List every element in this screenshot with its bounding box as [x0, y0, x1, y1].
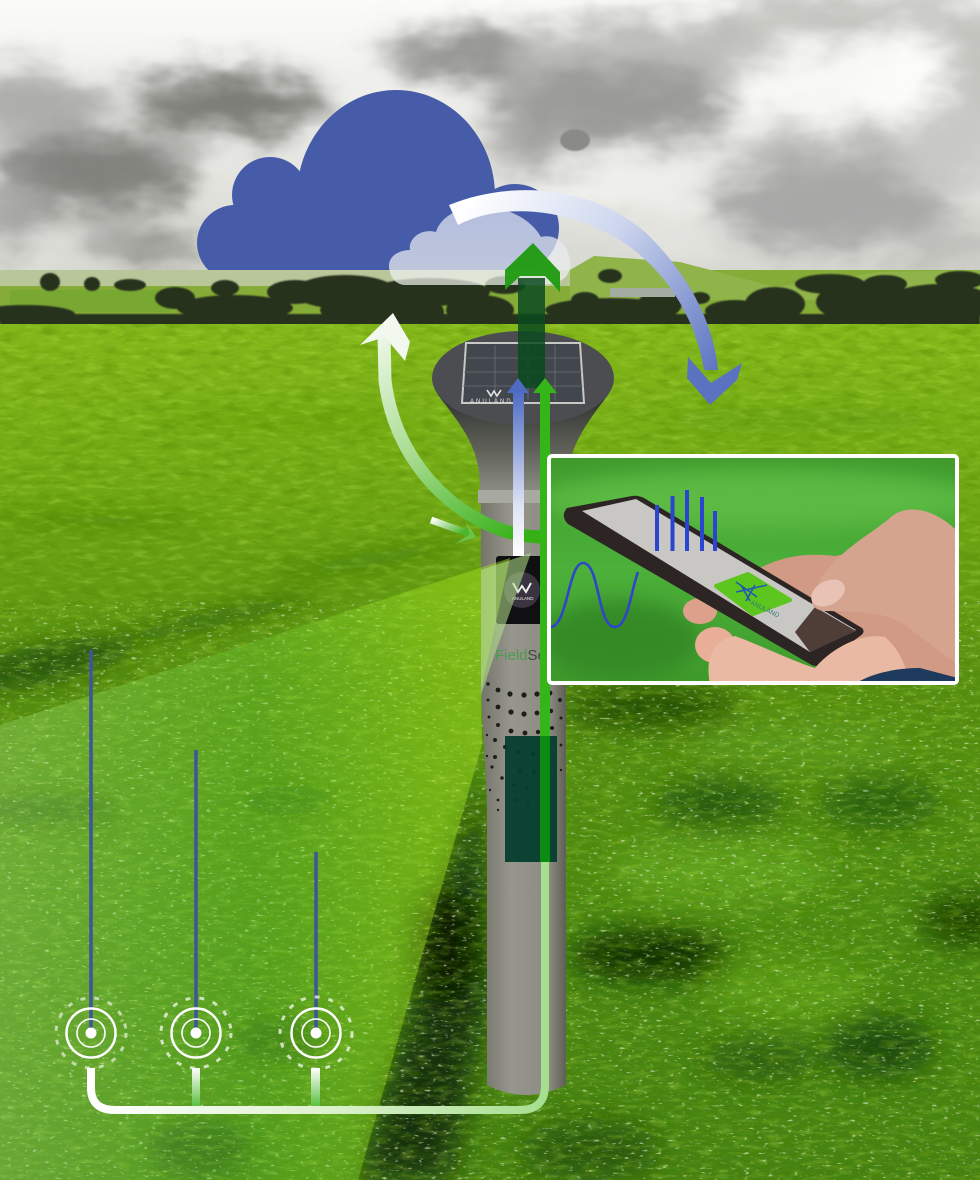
grass field [0, 322, 980, 1180]
large arc arrow: cloud to phone [449, 190, 742, 405]
post neck [438, 395, 608, 492]
post uplink dark block [505, 736, 557, 862]
inset photo [540, 470, 980, 684]
logo on panel: ANULAND [470, 399, 513, 405]
phone body [564, 496, 864, 666]
back hand [760, 554, 955, 678]
blue signal arrow [507, 378, 529, 556]
phone screen [582, 499, 856, 652]
sky with clouds [0, 0, 980, 272]
front hand [708, 636, 910, 684]
beam over post [481, 553, 531, 695]
display panel with logo [496, 556, 546, 624]
arrow head [360, 313, 410, 361]
small inbound arrow [431, 520, 476, 544]
light wedge beam over grass [0, 558, 510, 1180]
sensor 3 [280, 852, 352, 1069]
phone reflection [795, 607, 856, 652]
app icon [716, 574, 790, 620]
big green uplink arrow [505, 243, 560, 388]
sleeve [860, 668, 955, 681]
sensor 1 [56, 650, 126, 1068]
signal wave [550, 563, 638, 627]
speaker holes [486, 682, 562, 811]
thumb nail [811, 580, 845, 606]
post body [481, 500, 566, 1095]
signal bars [657, 490, 715, 551]
app icon: ANULAND [749, 600, 780, 620]
sensor wiring [91, 862, 545, 1110]
arrow head [687, 357, 742, 405]
green post conduit arrow [533, 378, 557, 862]
sensor 2 [161, 750, 231, 1068]
thumb [812, 510, 958, 665]
collar [478, 490, 568, 503]
phone inset panel [540, 456, 980, 684]
sensor post [432, 331, 614, 1095]
blue cloud [197, 90, 559, 270]
curved arrow: post to cloud [360, 313, 540, 537]
display panel with logo: ANULAND [512, 596, 534, 601]
distant fields and tree line [0, 256, 980, 326]
solar panel [462, 343, 584, 405]
light cloud [389, 207, 570, 285]
head disk [432, 331, 614, 425]
far hand fingers [683, 598, 717, 624]
FieldSense label: FieldSense [495, 647, 570, 664]
small dark cloud fragment [560, 129, 590, 151]
